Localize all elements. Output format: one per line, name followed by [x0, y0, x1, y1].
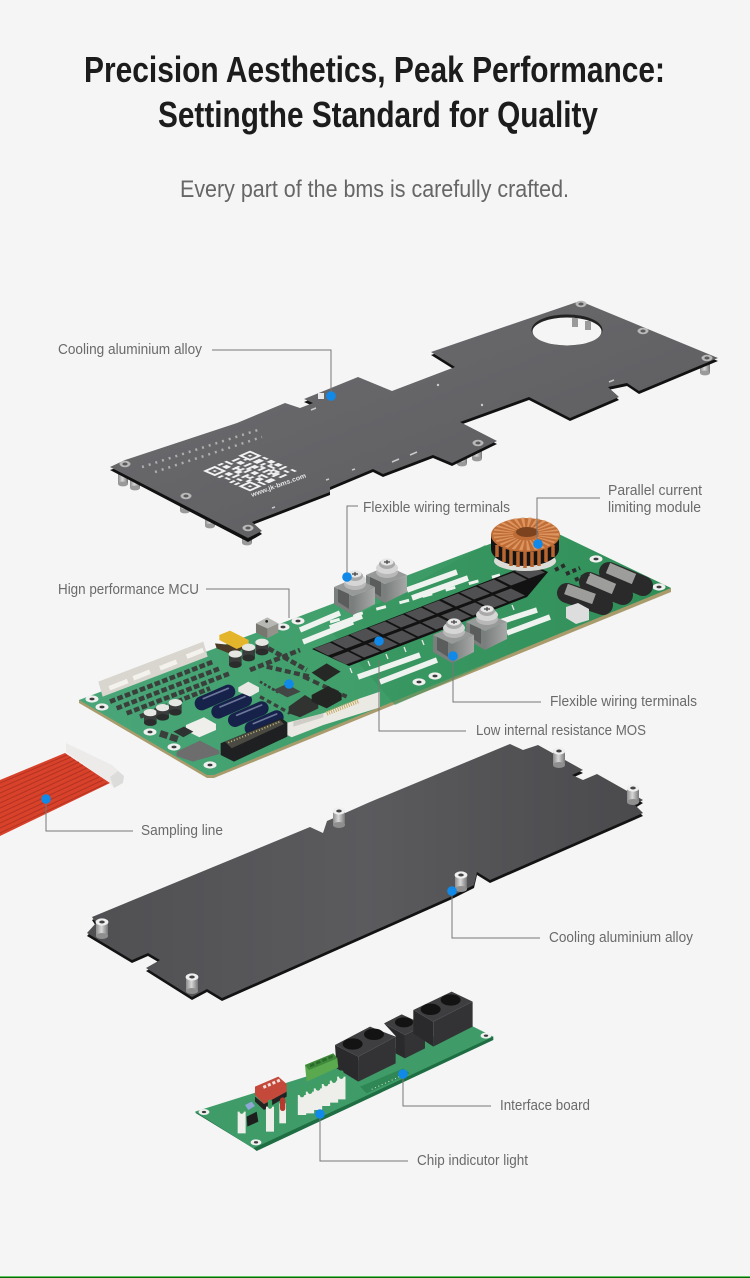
blue capacitors: [202, 688, 277, 728]
standoffs: [96, 747, 639, 994]
callout labels: Parallel current: [608, 483, 702, 499]
silkscreen on plate: [142, 380, 614, 508]
callout labels: Chip indicutor light: [417, 1153, 528, 1169]
small parts right: [555, 564, 589, 580]
silkscreen on plate: www.jk-bms.com: [249, 472, 307, 499]
yellow inductor: [215, 631, 249, 655]
leader lines: [46, 350, 600, 1161]
white ribbon connectors: [287, 692, 380, 737]
callout labels: Hign performance MCU: [58, 582, 199, 598]
red DIP switch: [255, 1077, 287, 1110]
mounting pads: [86, 555, 666, 769]
callout labels: Flexible wiring terminals: [363, 500, 510, 516]
callout labels: [58, 342, 702, 1169]
screw terminals: [334, 558, 507, 663]
ribbon connector: [66, 743, 124, 788]
black pin header: [221, 718, 287, 762]
callout labels: Sampling line: [141, 823, 223, 839]
MOSFET array: [312, 564, 548, 673]
components left: [98, 617, 380, 762]
interface board: [195, 992, 493, 1151]
small components: [242, 1075, 403, 1133]
subtitle: Every part of the bms is carefully crafted.: [180, 176, 569, 203]
callout labels: Flexible wiring terminals: [550, 694, 697, 710]
white header connectors: [98, 642, 208, 697]
LED columns: [302, 1073, 341, 1115]
title: Settingthe Standard for Quality: [158, 94, 598, 135]
callout labels: Cooling aluminium alloy: [549, 930, 694, 946]
main PCB board: [79, 518, 671, 778]
bottom green rule: [0, 1276, 750, 1278]
title: [84, 49, 665, 135]
large round cut-out: [532, 314, 602, 346]
white copper stripes: [300, 572, 550, 682]
callout labels: Cooling aluminium alloy: [58, 342, 203, 358]
callout labels: Interface board: [500, 1098, 590, 1114]
callout dots: [41, 391, 543, 1119]
toroid inductor: [491, 518, 560, 571]
top cooling aluminium plate: [110, 301, 718, 545]
capacitors right: [566, 568, 643, 624]
lower cooling aluminium plate: [87, 744, 643, 1001]
white and grey chips: [173, 663, 342, 762]
grey cube: [256, 617, 278, 638]
RJ45 blocks: [335, 992, 473, 1082]
small aluminium capacitors: [144, 639, 269, 726]
green terminal block: [305, 1053, 338, 1082]
callout labels: Low internal resistance MOS: [476, 723, 646, 739]
sampling line ribbon: [0, 743, 124, 836]
callout labels: limiting module: [608, 500, 701, 516]
QR code: [203, 451, 297, 491]
